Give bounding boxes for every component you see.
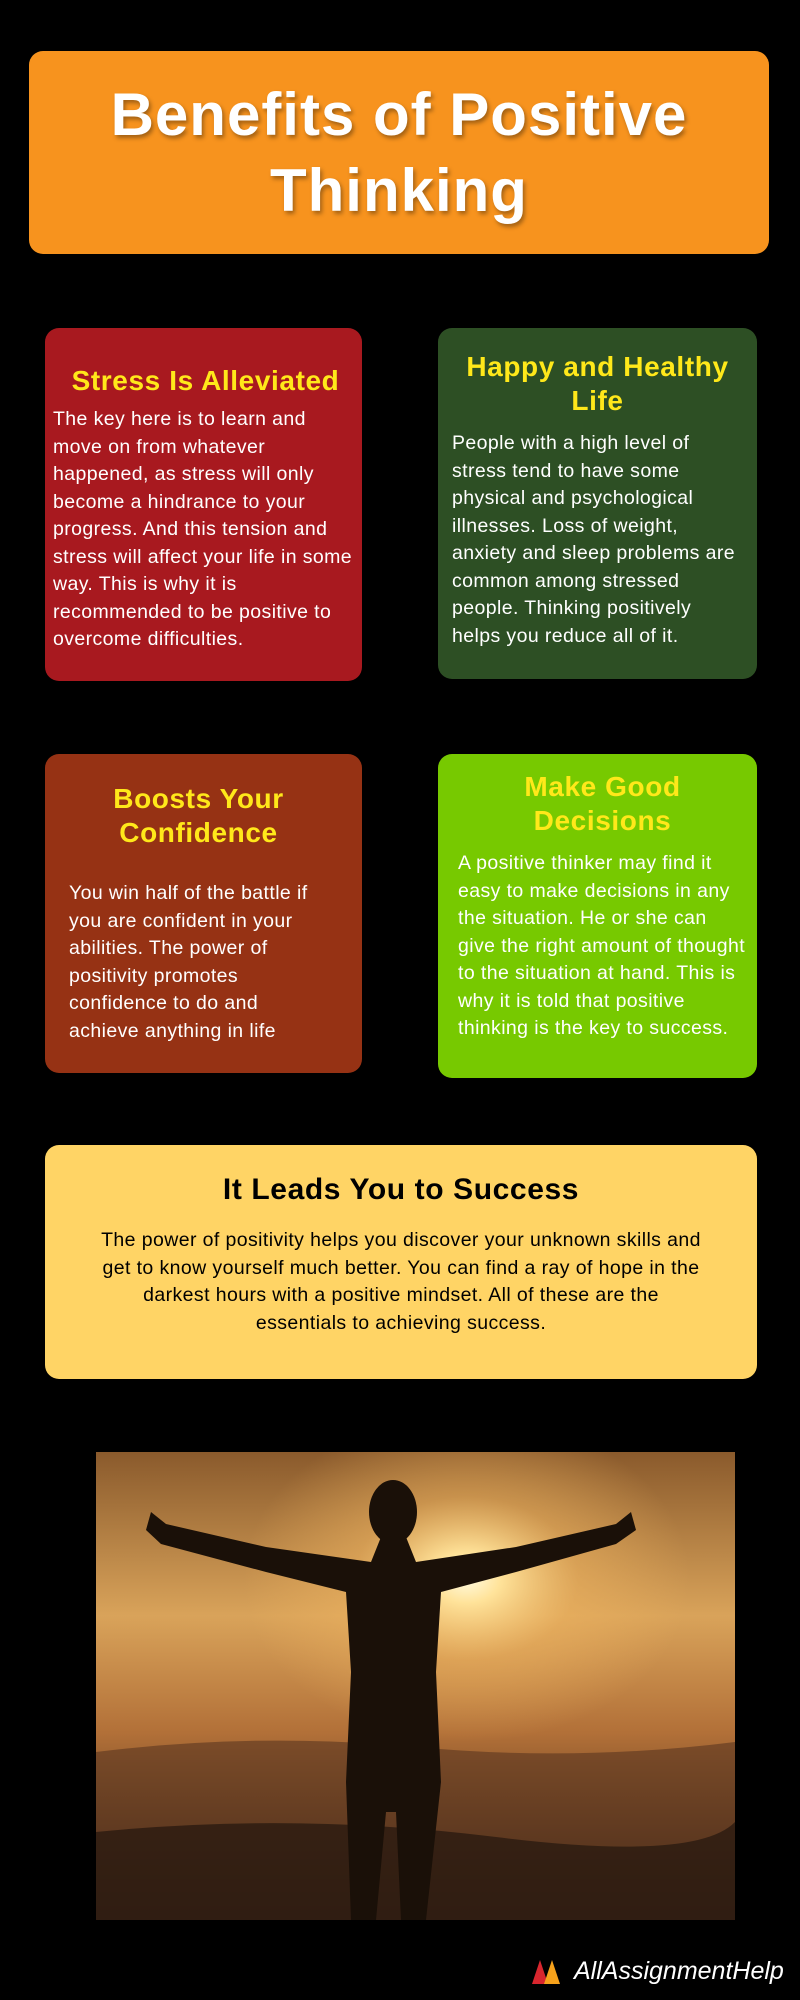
photo: silhouette at sunset [96, 1452, 735, 1920]
title: Thinking [270, 156, 528, 224]
panel: confidence [45, 754, 362, 1073]
heading: confidence: Boosts Your Confidence [113, 783, 284, 848]
panel: healthy [438, 328, 757, 679]
icon: logo mark [532, 1960, 560, 1984]
text: healthy: People with a high level of stress tend to have some physical and psychological illnesses. Loss of weight, anxiety and sleep problems are common among stressed people. Thinking positively helps you reduce all of it. [452, 432, 735, 646]
text: confidence: You win half of the battle if you are confident in your abilities. The power of positivity promotes confidence to do and achieve anything in life [69, 882, 308, 1042]
text: decisions: A positive thinker may find it easy to make decisions in any the situation. He or she can give the right amount of thought to the situation at hand. This is why it is told that positive thinking is the key to success. [458, 852, 745, 1039]
heading: healthy: Happy and Healthy Life [466, 351, 729, 416]
heading: success: It Leads You to Success [223, 1173, 579, 1206]
text: success: The power of positivity helps you discover your unknown skills and get to know yourself much better. You can find a ray of hope in the darkest hours with a positive mindset. All of these are the essentials to achieving success. [101, 1229, 701, 1334]
heading: decisions: Make Good Decisions [524, 771, 681, 836]
panel: success [45, 1145, 757, 1379]
logo: AllAssignmentHelp [574, 1956, 784, 1984]
text: stress: The key here is to learn and move on from whatever happened, as stress will only become a hindrance to your progress. And this tension and stress will affect your life in some way. This is why it is recommended to be positive to overcome difficulties. [53, 408, 352, 650]
panel: decisions [438, 754, 757, 1078]
panel: stress [45, 328, 362, 681]
title [29, 51, 769, 254]
heading: stress: Stress Is Alleviated [72, 365, 339, 396]
title: Benefits of Positive [111, 80, 687, 148]
